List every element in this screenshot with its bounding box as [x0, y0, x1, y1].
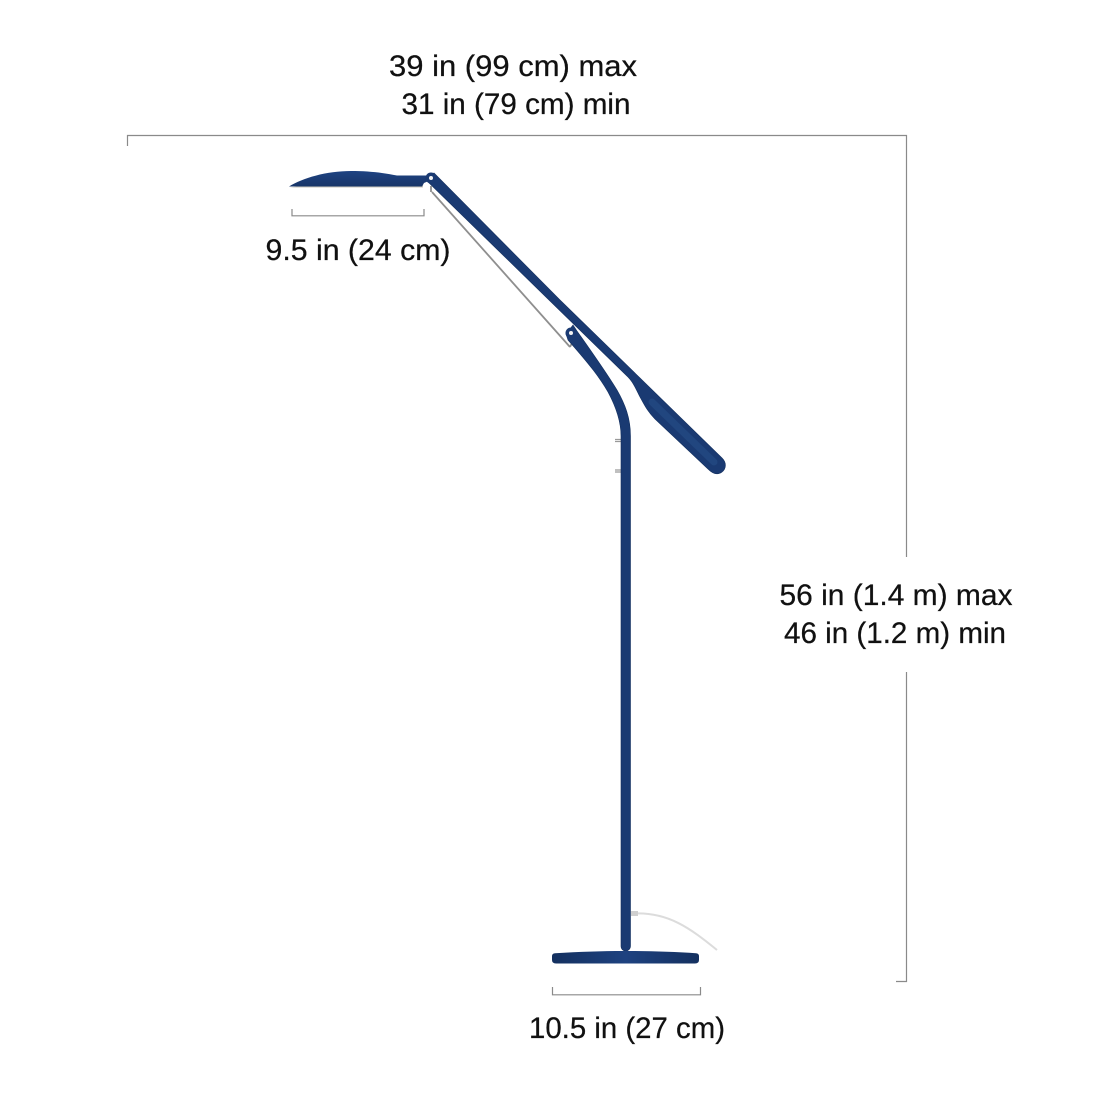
- label: overall width: 39 in (99 cm) max: [389, 50, 637, 83]
- label: overall width: 31 in (79 cm) min: [402, 88, 630, 121]
- icon: lower joint: [566, 328, 576, 338]
- bracket: base width: [552, 987, 700, 995]
- icon: height adjustment marks: [615, 440, 621, 472]
- icon: balance arm: [427, 173, 725, 474]
- icon: power cable: [631, 911, 717, 950]
- label: overall height: 46 in (1.2 m) min: [784, 617, 1006, 650]
- label: overall height: [780, 579, 1012, 650]
- label: shade width: 9.5 in (24 cm): [266, 234, 450, 267]
- icon: stem: [566, 325, 630, 951]
- icon: support rod: [431, 186, 573, 347]
- label: base width: 10.5 in (27 cm): [529, 1012, 725, 1045]
- label: overall width: [389, 50, 637, 121]
- bracket: overall width and height: [128, 136, 906, 982]
- lamp: [289, 171, 725, 964]
- icon: lamp shade: [289, 171, 431, 188]
- bracket: shade width: [292, 209, 424, 216]
- icon: arm highlight: [652, 402, 714, 462]
- icon: base: [552, 951, 699, 964]
- label: overall height: 56 in (1.4 m) max: [780, 579, 1012, 612]
- icon: upper joint: [426, 172, 436, 184]
